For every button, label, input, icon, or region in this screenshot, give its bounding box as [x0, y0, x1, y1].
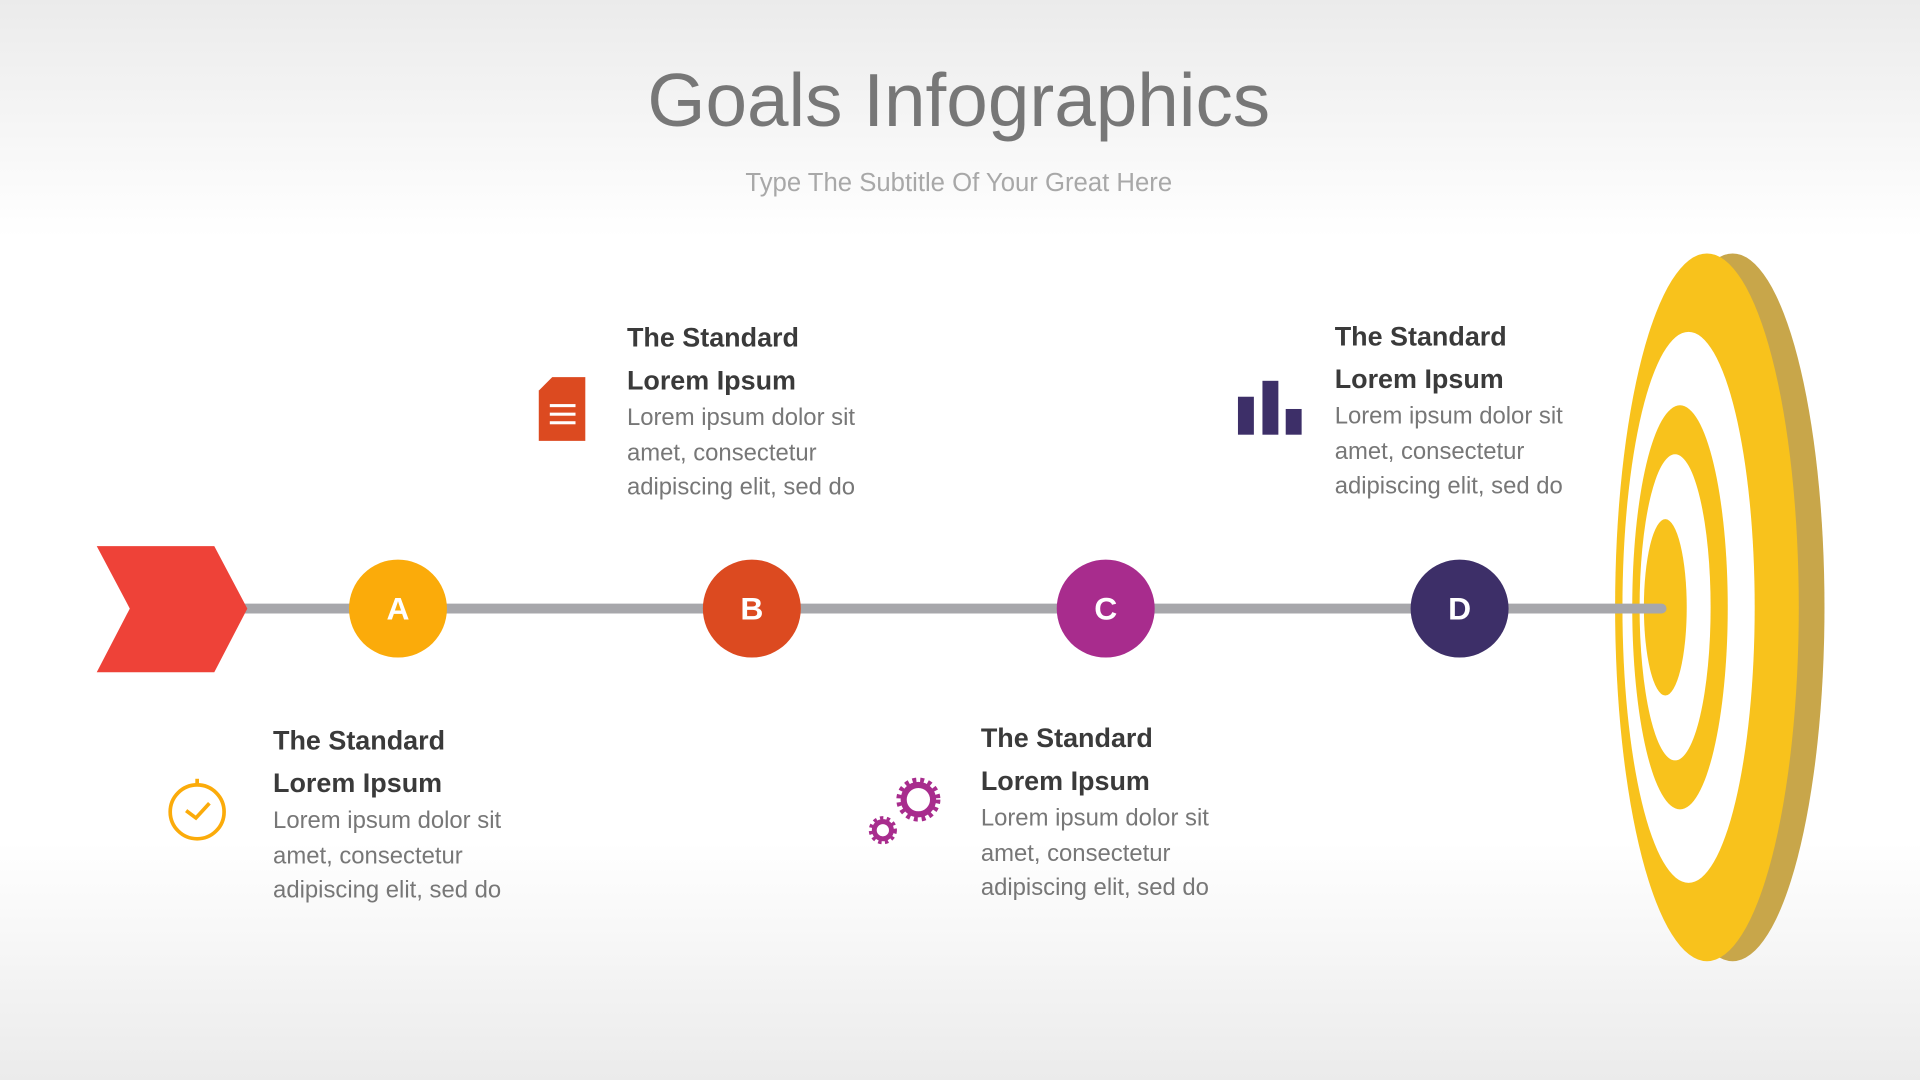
marker A	[349, 560, 447, 658]
text block B	[627, 323, 855, 501]
text block C: Lorem Ipsum	[981, 766, 1150, 796]
text block D	[1335, 321, 1563, 499]
marker B	[703, 560, 801, 658]
text block C: adipiscing elit, sed do	[981, 874, 1209, 901]
subtitle: Type The Subtitle Of Your Great Here	[745, 169, 1172, 197]
text block B: Lorem ipsum dolor sit	[627, 404, 855, 431]
icon: gears	[872, 781, 937, 841]
text block C: amet, consectetur	[981, 840, 1171, 867]
marker C	[1057, 560, 1155, 658]
text block B: amet, consectetur	[627, 439, 817, 466]
text block B: adipiscing elit, sed do	[627, 474, 855, 501]
text block A: adipiscing elit, sed do	[273, 877, 501, 904]
text block D: amet, consectetur	[1335, 438, 1524, 465]
text block D: Lorem ipsum dolor sit	[1335, 403, 1563, 430]
text block B: Lorem Ipsum	[627, 365, 796, 395]
marker D	[1411, 560, 1509, 658]
text block A: amet, consectetur	[273, 842, 463, 869]
text block C: The Standard	[981, 723, 1153, 753]
text block A: Lorem ipsum dolor sit	[273, 807, 502, 834]
text block D: Lorem Ipsum	[1335, 364, 1504, 394]
marker B: B	[740, 591, 763, 627]
text block A	[273, 725, 502, 904]
title: Goals Infographics	[647, 58, 1270, 142]
icon: bar chart	[1238, 381, 1302, 435]
marker C: C	[1094, 591, 1117, 627]
timeline line	[245, 605, 1662, 613]
text block B: The Standard	[627, 323, 799, 353]
text block D: adipiscing elit, sed do	[1335, 472, 1563, 499]
text block C	[981, 723, 1209, 901]
text block A: The Standard	[273, 725, 445, 755]
arrow chevron	[97, 546, 247, 672]
icon: document	[539, 377, 585, 441]
text block C: Lorem ipsum dolor sit	[981, 804, 1209, 831]
target	[1615, 253, 1824, 961]
icon: clock	[170, 779, 224, 839]
text block A: Lorem Ipsum	[273, 768, 442, 798]
text block D: The Standard	[1335, 321, 1507, 351]
marker D: D	[1448, 591, 1471, 627]
marker A: A	[386, 591, 409, 627]
